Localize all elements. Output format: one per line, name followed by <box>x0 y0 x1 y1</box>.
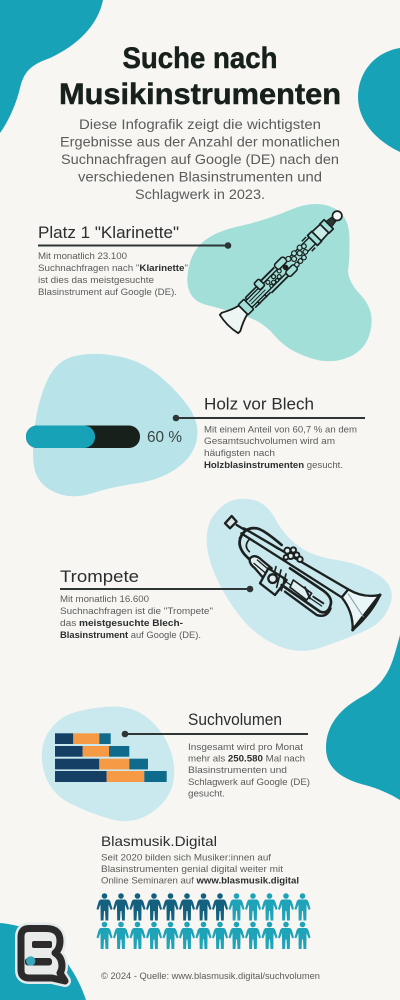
blob: trumpet background <box>207 499 392 651</box>
text block: Trompete: Blasinstrument auf Google (DE). <box>60 630 201 640</box>
label: 60 percent: 60 % <box>147 429 182 446</box>
text block: Holz <box>204 424 357 470</box>
icon: clarinet <box>219 203 350 334</box>
heading: Platz 1: Platz 1 "Klarinette" <box>38 224 179 242</box>
connector line <box>60 586 253 592</box>
text block: Suchvolumen <box>188 742 310 798</box>
heading: Blasmusik.Digital: Blasmusik.Digital <box>101 833 217 849</box>
text block: Klarinette <box>38 251 188 297</box>
panel: Blasmusik.Digital <box>96 833 310 949</box>
blob: progress background <box>33 354 197 496</box>
heading: Trompete: Trompete <box>60 568 139 586</box>
background blob: bottom left <box>0 923 86 1000</box>
background blob: lower right <box>326 635 400 800</box>
title: Suche nach <box>122 42 278 75</box>
intro text: verschiedenen Blasinstrumenten und <box>78 170 322 184</box>
panel: Trompete <box>60 499 392 651</box>
text block: Blasmusik <box>101 852 299 886</box>
intro text <box>60 117 340 202</box>
panel: Platz 1 Klarinette <box>38 203 372 361</box>
text block: Suchvolumen: Blasinstrumenten und <box>188 765 287 775</box>
footer source: © 2024 - Quelle: www.blasmusik.digital/suchvolumen <box>101 971 320 982</box>
logo: speech bubble B <box>21 928 65 981</box>
stacked bar chart <box>55 733 167 782</box>
blob: chart background <box>42 706 174 821</box>
intro text: Schlagwerk in 2023. <box>135 187 265 202</box>
text block: Blasmusik: Online Seminaren auf www.blasmusik.digital <box>101 876 299 886</box>
text block: Klarinette: Suchnachfragen nach " Klarinette " <box>38 263 188 273</box>
text block: Trompete: Mit monatlich 16.600 <box>60 594 149 604</box>
text block: Suchvolumen: gesucht. <box>188 788 225 798</box>
panel: Suchvolumen <box>42 706 310 821</box>
progress bar 60 percent <box>26 426 140 448</box>
connector line <box>122 731 308 737</box>
text block: Klarinette: Blasinstrument auf Google (DE). <box>38 287 177 297</box>
text block: Trompete <box>60 594 213 640</box>
text block: Holz: Gesamtsuchvolumen wird am <box>204 436 335 446</box>
text block: Holz: Holzblasinstrumenten gesucht. <box>204 460 343 470</box>
background blob: top right <box>358 48 400 152</box>
text block: Suchvolumen: mehr als 250.580 Mal nach <box>188 754 305 764</box>
connector line <box>38 242 231 249</box>
text block: Holz: häufigsten nach <box>204 448 275 458</box>
text block: Trompete: Suchnachfragen ist die "Trompete" <box>60 606 213 616</box>
text block: Holz: Mit einem Anteil von 60,7 % an dem <box>204 424 357 434</box>
connector line <box>173 415 365 421</box>
pictogram: people row 2 <box>96 922 310 949</box>
heading: Suchvolumen: Suchvolumen <box>188 711 282 729</box>
text block: Blasmusik: Seit 2020 bilden sich Musiker:innen auf <box>101 852 271 862</box>
blob: clarinet background <box>187 204 372 361</box>
heading: Holz vor Blech: Holz vor Blech <box>204 396 314 414</box>
text block: Klarinette: Mit monatlich 23.100 <box>38 251 127 261</box>
intro text: Ergebnisse aus der Anzahl der monatlichen <box>60 134 340 150</box>
text block: Trompete: das meistgesuchte Blech- <box>60 618 183 628</box>
text block: Blasmusik: Blasinstrumenten genial digital weiter mit <box>101 864 283 874</box>
text block: Suchvolumen: Insgesamt wird pro Monat <box>188 742 303 752</box>
text block: Klarinette: ist dies das meistgesuchte <box>38 275 154 285</box>
intro text: Diese Infografik zeigt die wichtigsten <box>79 117 321 132</box>
intro text: Suchnachfragen auf Google (DE) nach den <box>61 152 339 167</box>
pictogram: people row 1 <box>96 893 310 920</box>
text block: Suchvolumen: Schlagwerk auf Google (DE) <box>188 777 310 787</box>
panel: Holz vor Blech <box>26 354 365 496</box>
icon: trumpet <box>225 516 380 630</box>
title <box>59 42 341 111</box>
title: Musikinstrumenten <box>59 78 341 111</box>
background blob: top left <box>0 0 103 133</box>
